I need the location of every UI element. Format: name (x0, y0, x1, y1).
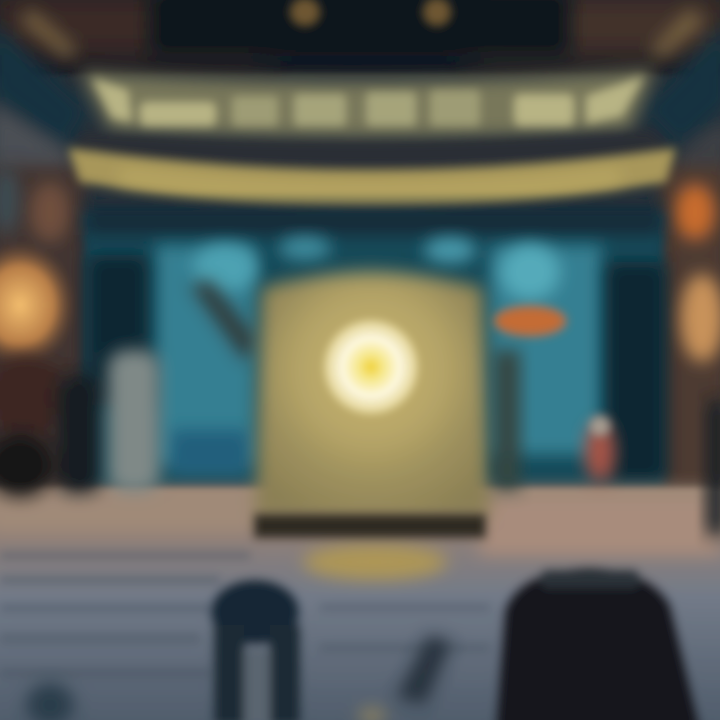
center panel (254, 273, 490, 538)
stage base (254, 514, 486, 538)
floor (0, 488, 720, 720)
glowing light (319, 315, 423, 419)
ceiling (0, 0, 720, 75)
sign: blurred title band (80, 70, 655, 137)
foreground small shapes (26, 683, 386, 720)
foreground silhouette: arm (396, 635, 452, 705)
diagonal arm shape (190, 280, 258, 362)
figure at the right of the stage (585, 400, 720, 535)
halo around the light (286, 282, 456, 452)
dark gap below sign (70, 130, 670, 168)
side walls (0, 165, 720, 495)
figures at the left of the stage (0, 350, 160, 497)
blue back wall (85, 205, 663, 487)
foreground silhouette: left person (211, 580, 300, 720)
side ceiling beams (0, 20, 720, 200)
side panel post (494, 350, 520, 490)
orange sign blob (494, 306, 566, 336)
gold curved band (68, 148, 676, 207)
foreground silhouette: large right figure (496, 568, 700, 720)
dark columns (88, 255, 666, 482)
